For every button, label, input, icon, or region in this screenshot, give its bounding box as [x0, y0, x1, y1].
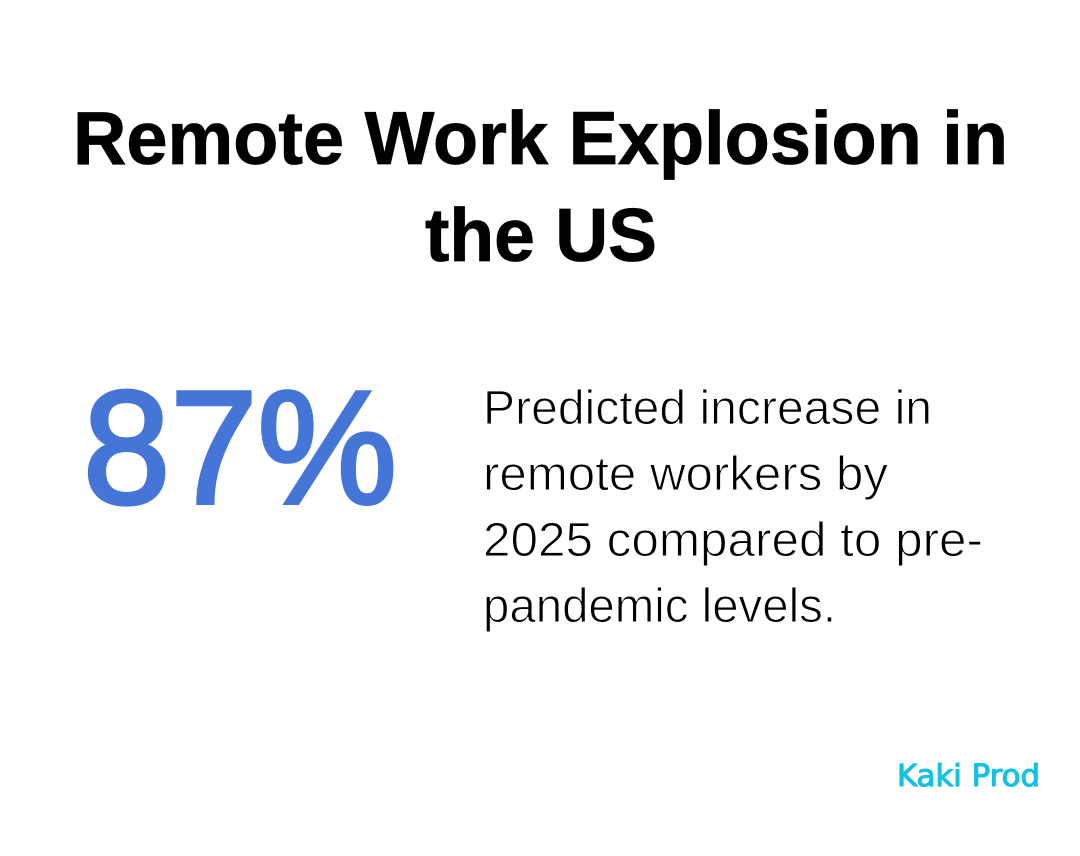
logo: Kaki Prod: Kaki Prod — [897, 759, 1040, 794]
description text: pandemic levels. — [483, 580, 836, 633]
title: Remote Work Explosion in — [73, 96, 1008, 180]
description text: remote workers by — [483, 448, 888, 501]
big statistic: 87%: 87% — [83, 358, 397, 538]
description text: 2025 compared to pre- — [483, 514, 983, 567]
title — [73, 96, 1008, 277]
description text — [483, 382, 983, 633]
description text: Predicted increase in — [483, 382, 932, 435]
title: the US — [425, 193, 657, 277]
